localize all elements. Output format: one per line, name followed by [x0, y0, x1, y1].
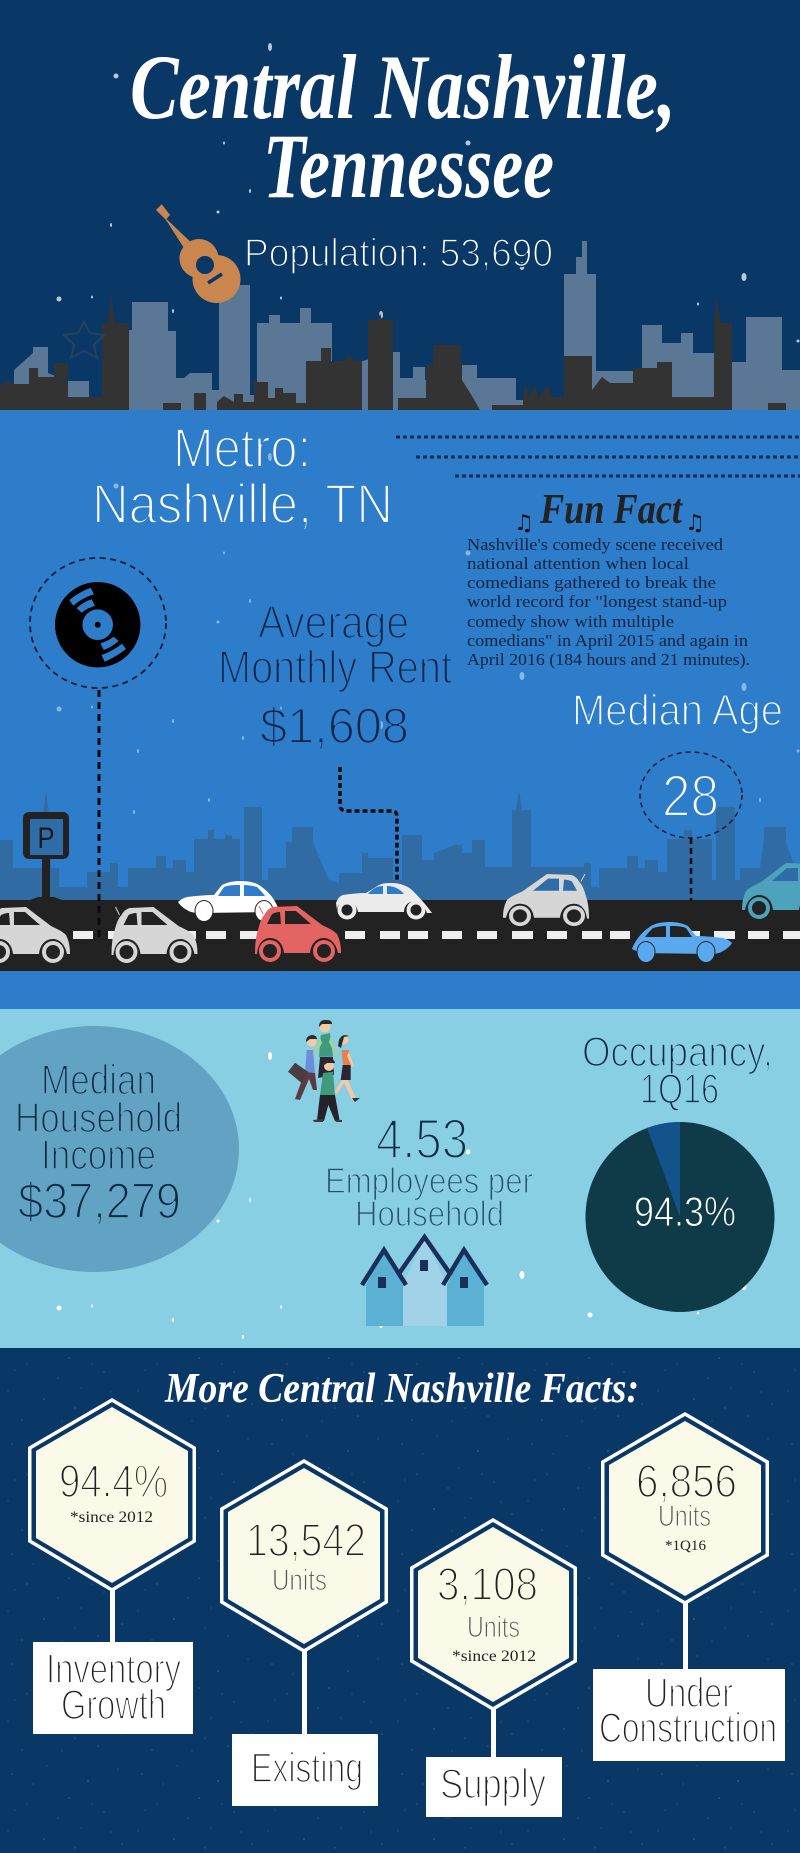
- fact: existing: Units: [272, 1564, 327, 1597]
- title: [130, 36, 676, 217]
- metro heading: Metro:: [173, 416, 311, 479]
- connector: rent to road: [340, 767, 397, 880]
- fun fact text: comedians" in April 2015 and again in: [467, 631, 749, 650]
- connector: age to road: [690, 838, 692, 901]
- population: Population: 53,690: [244, 232, 553, 275]
- icon: parking sign: [23, 812, 69, 900]
- fun fact text: comedy show with multiple: [467, 612, 674, 631]
- fact: under construction: 6,856: [636, 1455, 737, 1507]
- panel: median household income: [0, 1026, 239, 1272]
- median age value circle: 28: [662, 764, 719, 829]
- title: Central Nashville,: [130, 36, 676, 138]
- fun fact text: national attention when local: [467, 554, 689, 573]
- title: Tennessee: [263, 115, 554, 217]
- section background: metro: [0, 410, 800, 1009]
- average monthly rent: $1,608: [260, 698, 409, 754]
- fact: existing: 13,542: [246, 1514, 366, 1566]
- average monthly rent: [218, 596, 452, 754]
- skyline: metro: [0, 790, 800, 900]
- road: [0, 900, 800, 971]
- icon: vinyl record: [30, 558, 166, 688]
- car: blue sedan: [632, 922, 732, 963]
- icon: houses: [362, 1237, 487, 1326]
- connector: record to road: [98, 690, 100, 938]
- panel: median household income: Household: [15, 1094, 182, 1141]
- fact: inventory growth: Inventory: [46, 1645, 181, 1692]
- front man: [313, 1059, 342, 1122]
- median age: Median Age: [572, 686, 783, 735]
- fun fact text: [467, 535, 750, 669]
- car: grey hatchback: [112, 907, 198, 965]
- fact: supply: Units: [467, 1611, 520, 1644]
- fun fact heading: Fun Fact: [539, 487, 683, 533]
- fact: inventory growth: Growth: [61, 1681, 166, 1728]
- fact: under construction: [593, 1412, 785, 1761]
- fun fact text: April 2016 (184 hours and 21 minutes).: [467, 650, 750, 669]
- fun fact heading: ♫: [685, 511, 705, 536]
- car: red hatchback: [255, 906, 341, 964]
- tall man: [312, 1020, 339, 1078]
- employees per household: Employees per: [325, 1160, 533, 1201]
- dotted lines: [396, 437, 800, 476]
- car: light beetle: [336, 883, 432, 920]
- occupancy heading: Occupancy,: [582, 1028, 773, 1075]
- fun fact text: comedians gathered to break the: [467, 573, 716, 592]
- occupancy heading: 1Q16: [640, 1065, 719, 1112]
- fact: under construction: Units: [658, 1500, 711, 1533]
- fun fact text: world record for "longest stand-up: [467, 592, 727, 611]
- car: grey hatchback facing left: [503, 874, 589, 928]
- icon: guitar: [156, 204, 240, 303]
- occupancy heading: [582, 1028, 773, 1112]
- section background: household: [0, 1009, 800, 1348]
- panel: median household income: Median: [41, 1056, 156, 1103]
- fun fact heading: ♫: [514, 511, 534, 536]
- car: white sedan: [178, 881, 278, 922]
- employees per household: 4.53: [376, 1107, 468, 1170]
- panel: median household income: $37,279: [18, 1173, 181, 1229]
- fact: existing: [220, 1459, 388, 1806]
- fact: inventory growth: *since 2012: [70, 1509, 153, 1526]
- average monthly rent: Monthly Rent: [218, 641, 452, 693]
- fact: supply: Supply: [440, 1760, 546, 1807]
- car: teal hatchback: [742, 863, 800, 921]
- heading: more facts: More Central Nashville Facts:: [164, 1366, 639, 1412]
- fact: supply: *since 2012: [452, 1648, 536, 1665]
- pie chart: occupancy: [586, 1122, 774, 1312]
- fact: inventory growth: 94.4%: [59, 1455, 168, 1507]
- man with briefcase: [288, 1035, 317, 1100]
- fact: supply: [410, 1518, 577, 1817]
- metro heading: [92, 416, 393, 535]
- section background: night sky: [0, 0, 800, 410]
- metro heading: Nashville, TN: [92, 472, 393, 535]
- median age value circle: [640, 752, 742, 838]
- icon: group of people walking: [288, 1020, 360, 1122]
- icon: faint star outline: [64, 322, 104, 358]
- fact: under construction: *1Q16: [665, 1538, 706, 1554]
- fact: inventory growth: [28, 1398, 196, 1734]
- road lane markings: [73, 931, 800, 939]
- panel: median household income: Income: [41, 1131, 156, 1178]
- fact: supply: 3,108: [437, 1558, 538, 1610]
- car: grey hatchback left: [0, 907, 70, 965]
- fact: existing: Existing: [251, 1744, 363, 1791]
- fun fact text: Nashville's comedy scene received: [467, 535, 724, 554]
- fact: under construction: Under: [645, 1669, 733, 1716]
- skyline: top back buildings: [14, 241, 800, 410]
- employees per household: Household: [355, 1193, 504, 1234]
- section background: more facts: [0, 1348, 800, 1853]
- skyline: top front buildings: [0, 295, 786, 410]
- icon: parking sign: P: [38, 822, 54, 855]
- average monthly rent: Average: [258, 596, 409, 648]
- pie chart: occupancy: 94.3%: [634, 1188, 736, 1235]
- woman: [334, 1035, 360, 1102]
- employees per household: [325, 1107, 533, 1234]
